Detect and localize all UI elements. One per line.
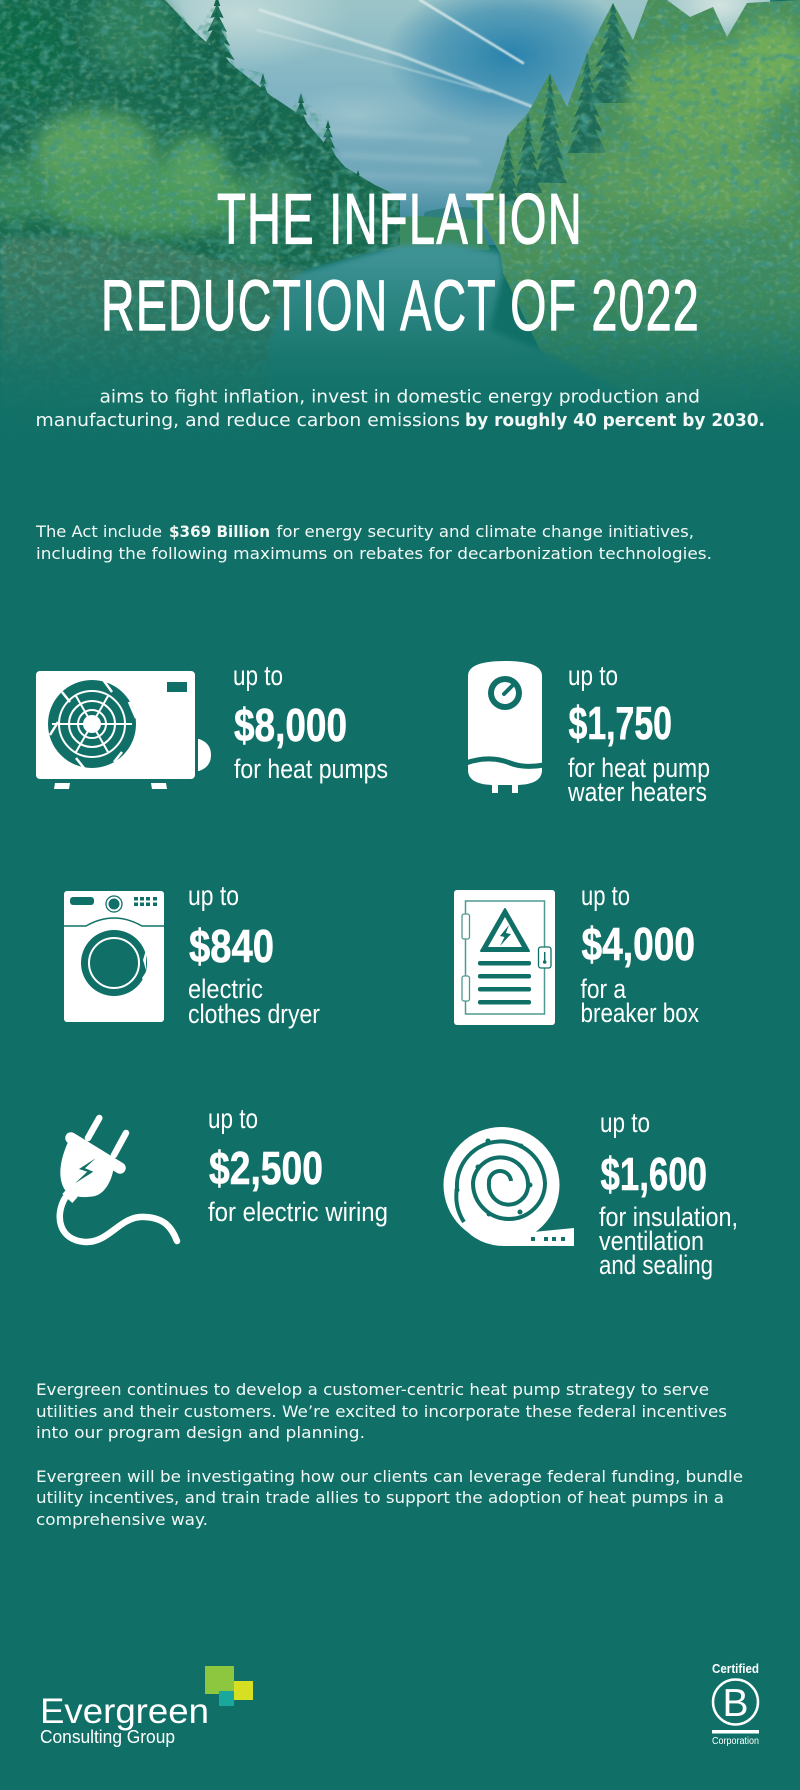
amount: $840: clothes dryer [188,999,320,1029]
left bank [0,236,330,440]
title: THE INFLATION [217,180,583,260]
funding text: for energy security and climate change initiatives, [276,522,694,541]
teal fade overlay [0,260,800,450]
panel: breaker box [454,880,699,1028]
foliage texture [0,0,800,375]
icon: breaker box [454,890,555,1025]
amount: $8,000: for heat pumps [234,754,388,784]
amount: $2,500: up to [208,1103,258,1134]
hero photo: forest river [0,0,800,399]
amount: $1,600: for insulation, [599,1202,738,1232]
distant hill and trees [370,207,490,250]
amount: $4,000: breaker box [580,998,699,1028]
logo: Evergreen Consulting Group: Consulting Group [40,1727,175,1747]
amount: $1,750 [567,660,710,807]
icon: electric plug [60,1118,177,1242]
closing text: Evergreen will be investigating how our clients can leverage federal funding, bundle [36,1467,743,1486]
contrails [257,0,533,107]
amount: $1,750: water heaters [567,777,707,807]
amount: $1,600: and sealing [599,1250,713,1280]
closing text [36,1380,743,1529]
sky [130,0,780,245]
icon: insulation roll [444,1127,574,1246]
amount: $1,600: ventilation [599,1226,704,1256]
amount: $840: electric [188,974,263,1004]
amount: $1,600: $1,600 [600,1148,707,1200]
funding text: The Act include [35,522,162,541]
logo: Certified B Corporation [712,1661,759,1747]
intro text: manufacturing, and reduce carbon emissions [36,410,460,431]
panel: insulation [444,1107,738,1280]
icon: water heater [466,661,544,793]
amount: $4,000: up to [581,880,630,911]
panel: water heaters [466,660,710,807]
amount: $8,000: up to [233,660,283,691]
panel: heat pumps [36,660,388,789]
logo: Evergreen Consulting Group: Evergreen [40,1692,209,1731]
icon: heat pump unit [36,671,211,789]
amount: $4,000: for a [580,974,627,1004]
funding text: including the following maximums on rebates for decarbonization technologies. [36,544,712,563]
intro text: aims to fight inflation, invest in domestic energy production and [100,386,700,408]
title [101,180,700,346]
amount: $1,750: up to [568,660,618,691]
logo: Certified B Corporation: Corporation [712,1736,759,1747]
amount: $8,000 [233,660,388,784]
funding text [35,522,712,563]
river [260,243,640,440]
closing text: utilities and their customers. We’re excited to incorporate these federal incentives [36,1402,727,1421]
amount: $2,500 [208,1103,388,1227]
amount: $4,000: $4,000 [582,918,695,970]
amount: $2,500: for electric wiring [208,1197,388,1227]
amount: $1,600: up to [600,1107,650,1138]
left forest [0,0,400,273]
amount: $2,500: $2,500 [209,1142,323,1194]
amount: $840: up to [188,880,239,911]
panel: electric wiring [60,1103,388,1242]
amount: $1,750: $1,750 [568,697,672,749]
logo: Evergreen Consulting Group [40,1666,253,1747]
logo: Certified B Corporation: Certified [712,1661,759,1676]
intro text: by roughly 40 percent by 2030. [465,410,765,431]
amount: $840: $840 [189,920,274,972]
closing text: comprehensive way. [36,1510,208,1529]
icon: clothes dryer [64,891,164,1022]
funding text: $369 Billion [169,522,270,541]
amount: $8,000: $8,000 [234,699,347,751]
logo: Certified B Corporation: B [722,1682,749,1725]
amount: $4,000 [580,880,699,1028]
amount: $840 [188,880,320,1029]
intro text [36,386,765,431]
closing text: utility incentives, and train trade allies to support the adoption of heat pumps in a [36,1488,724,1507]
closing text: into our program design and planning. [36,1423,365,1442]
closing text: Evergreen continues to develop a customer-centric heat pump strategy to serve [36,1380,709,1399]
amount: $1,600 [599,1107,738,1280]
amount: $1,750: for heat pump [568,753,710,783]
right forest [470,0,800,440]
panel: clothes dryer [64,880,320,1029]
